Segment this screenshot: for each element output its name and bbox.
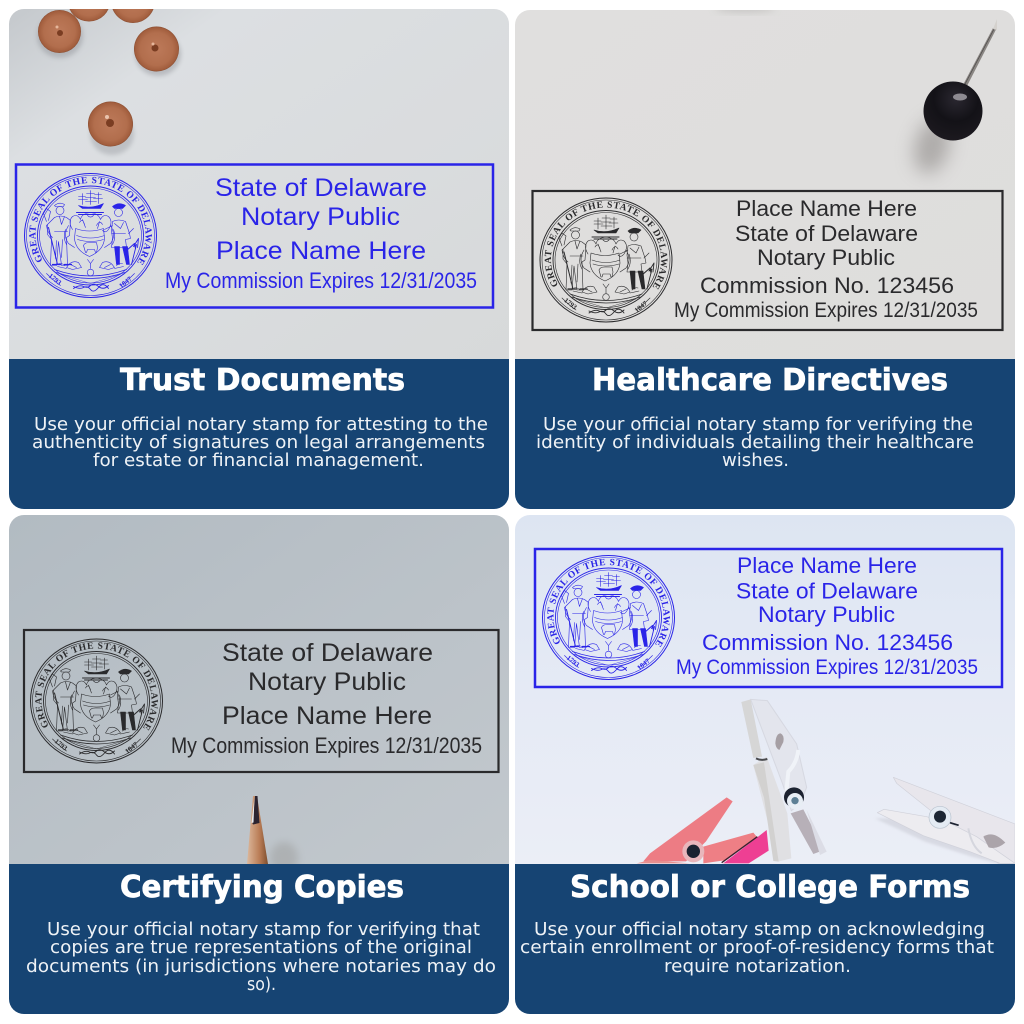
- caption block: [515, 864, 1015, 1015]
- stamp impression: blue: Place Name Here: [216, 237, 426, 265]
- pink peg: [643, 797, 733, 861]
- seal: GREAT SEAL OF THE STATE OF DELAWARE: [544, 201, 668, 290]
- body text: Use your official notary stamp for verifying the: [543, 415, 973, 435]
- stamp impression: black: Notary Public: [757, 245, 895, 270]
- seal: GREAT SEAL OF THE STATE OF DELAWARE: [547, 558, 670, 647]
- body text: certain enrollment or proof-of-residency forms that: [520, 938, 994, 958]
- white upright peg shadow: [790, 810, 819, 854]
- stamp text: Place Name Here: [736, 196, 917, 221]
- panel: Trust Documents: [9, 9, 509, 509]
- stamp impression: blue: [534, 548, 1004, 688]
- stamp text: Place Name Here: [737, 553, 917, 578]
- photo: black push pin: [515, 4, 1015, 360]
- panel: Healthcare Directives: [515, 10, 1015, 509]
- stamp impression: blue: Commission No. 123456: [702, 630, 953, 655]
- photo: pencil tip: [9, 515, 509, 874]
- heading: Healthcare Directives: [592, 363, 948, 398]
- heading: School or College Forms: [570, 870, 970, 905]
- seal: 1847: [633, 299, 649, 314]
- heading: Certifying Copies: [120, 870, 404, 905]
- seal: 1793: [53, 737, 69, 753]
- stamp impression: black: Commission No. 123456: [700, 273, 954, 298]
- panel: Certifying Copies: [9, 515, 509, 1014]
- body text: wishes.: [722, 451, 789, 471]
- caption block: [515, 359, 1015, 510]
- seal: GREAT SEAL OF THE STATE OF DELAWARE: [35, 642, 158, 730]
- body text: [32, 415, 488, 471]
- body text: [538, 416, 973, 466]
- body text: authenticity of signatures on legal arrangements: [32, 433, 485, 453]
- body text: identity of individuals detailing their healthcare: [536, 433, 974, 453]
- seal: 1847: [636, 657, 652, 672]
- body text: Use your official notary stamp for attesting to the: [34, 415, 488, 435]
- seal: 1847: [118, 275, 134, 290]
- body text: require notarization.: [664, 957, 851, 977]
- seal: 1793: [562, 296, 579, 312]
- seal: 1793: [565, 654, 581, 669]
- stamp impression: black: Place Name Here: [222, 702, 432, 730]
- stamp impression: black: Notary Public: [248, 668, 406, 696]
- caption block: [9, 864, 509, 1015]
- stamp impression: blue: State of Delaware: [736, 578, 918, 604]
- seal: 1793: [47, 272, 63, 287]
- panel: School or College Forms: [515, 515, 1015, 1014]
- seal: GREAT SEAL OF THE STATE OF DELAWARE: [29, 176, 152, 265]
- body text: copies are true representations of the original: [50, 938, 472, 958]
- seal: [24, 173, 157, 298]
- seal: 1847: [124, 740, 140, 755]
- body text: so).: [247, 975, 276, 995]
- stamp impression: blue: My Commission Expires 12/31/2035: [676, 656, 978, 679]
- stamp impression: blue: Notary Public: [241, 203, 400, 231]
- seal: [30, 638, 163, 764]
- stamp impression: blue: My Commission Expires 12/31/2035: [165, 268, 477, 293]
- seal: [542, 555, 675, 680]
- stamp impression: black: My Commission Expires 12/31/2035: [674, 299, 978, 322]
- stamp impression: blue: [14, 163, 494, 309]
- body text: documents (in jurisdictions where notaries may do: [26, 957, 496, 977]
- body text: [26, 920, 496, 995]
- body text: Use your official notary stamp for verifying that: [47, 920, 480, 940]
- white lying peg: [875, 818, 1018, 865]
- stamp impression: black: My Commission Expires 12/31/2035: [171, 733, 482, 758]
- stamp impression: black: [531, 190, 1004, 332]
- photo: copper tacks on paper: [9, 0, 509, 360]
- body text: Use your official notary stamp on acknowledging: [534, 920, 985, 940]
- heading: Trust Documents: [120, 363, 405, 398]
- body text: [520, 920, 994, 977]
- stamp impression: black: [22, 628, 500, 774]
- photo: clothespins: [515, 515, 1018, 865]
- seal: [540, 198, 672, 322]
- body text: for estate or financial management.: [93, 451, 424, 471]
- stamp text: State of Delaware: [215, 174, 427, 202]
- white upright peg: [751, 699, 807, 811]
- stamp text: State of Delaware: [222, 639, 433, 667]
- stamp impression: blue: Notary Public: [758, 602, 895, 627]
- caption block: [9, 359, 509, 510]
- stamp impression: black: State of Delaware: [735, 221, 918, 246]
